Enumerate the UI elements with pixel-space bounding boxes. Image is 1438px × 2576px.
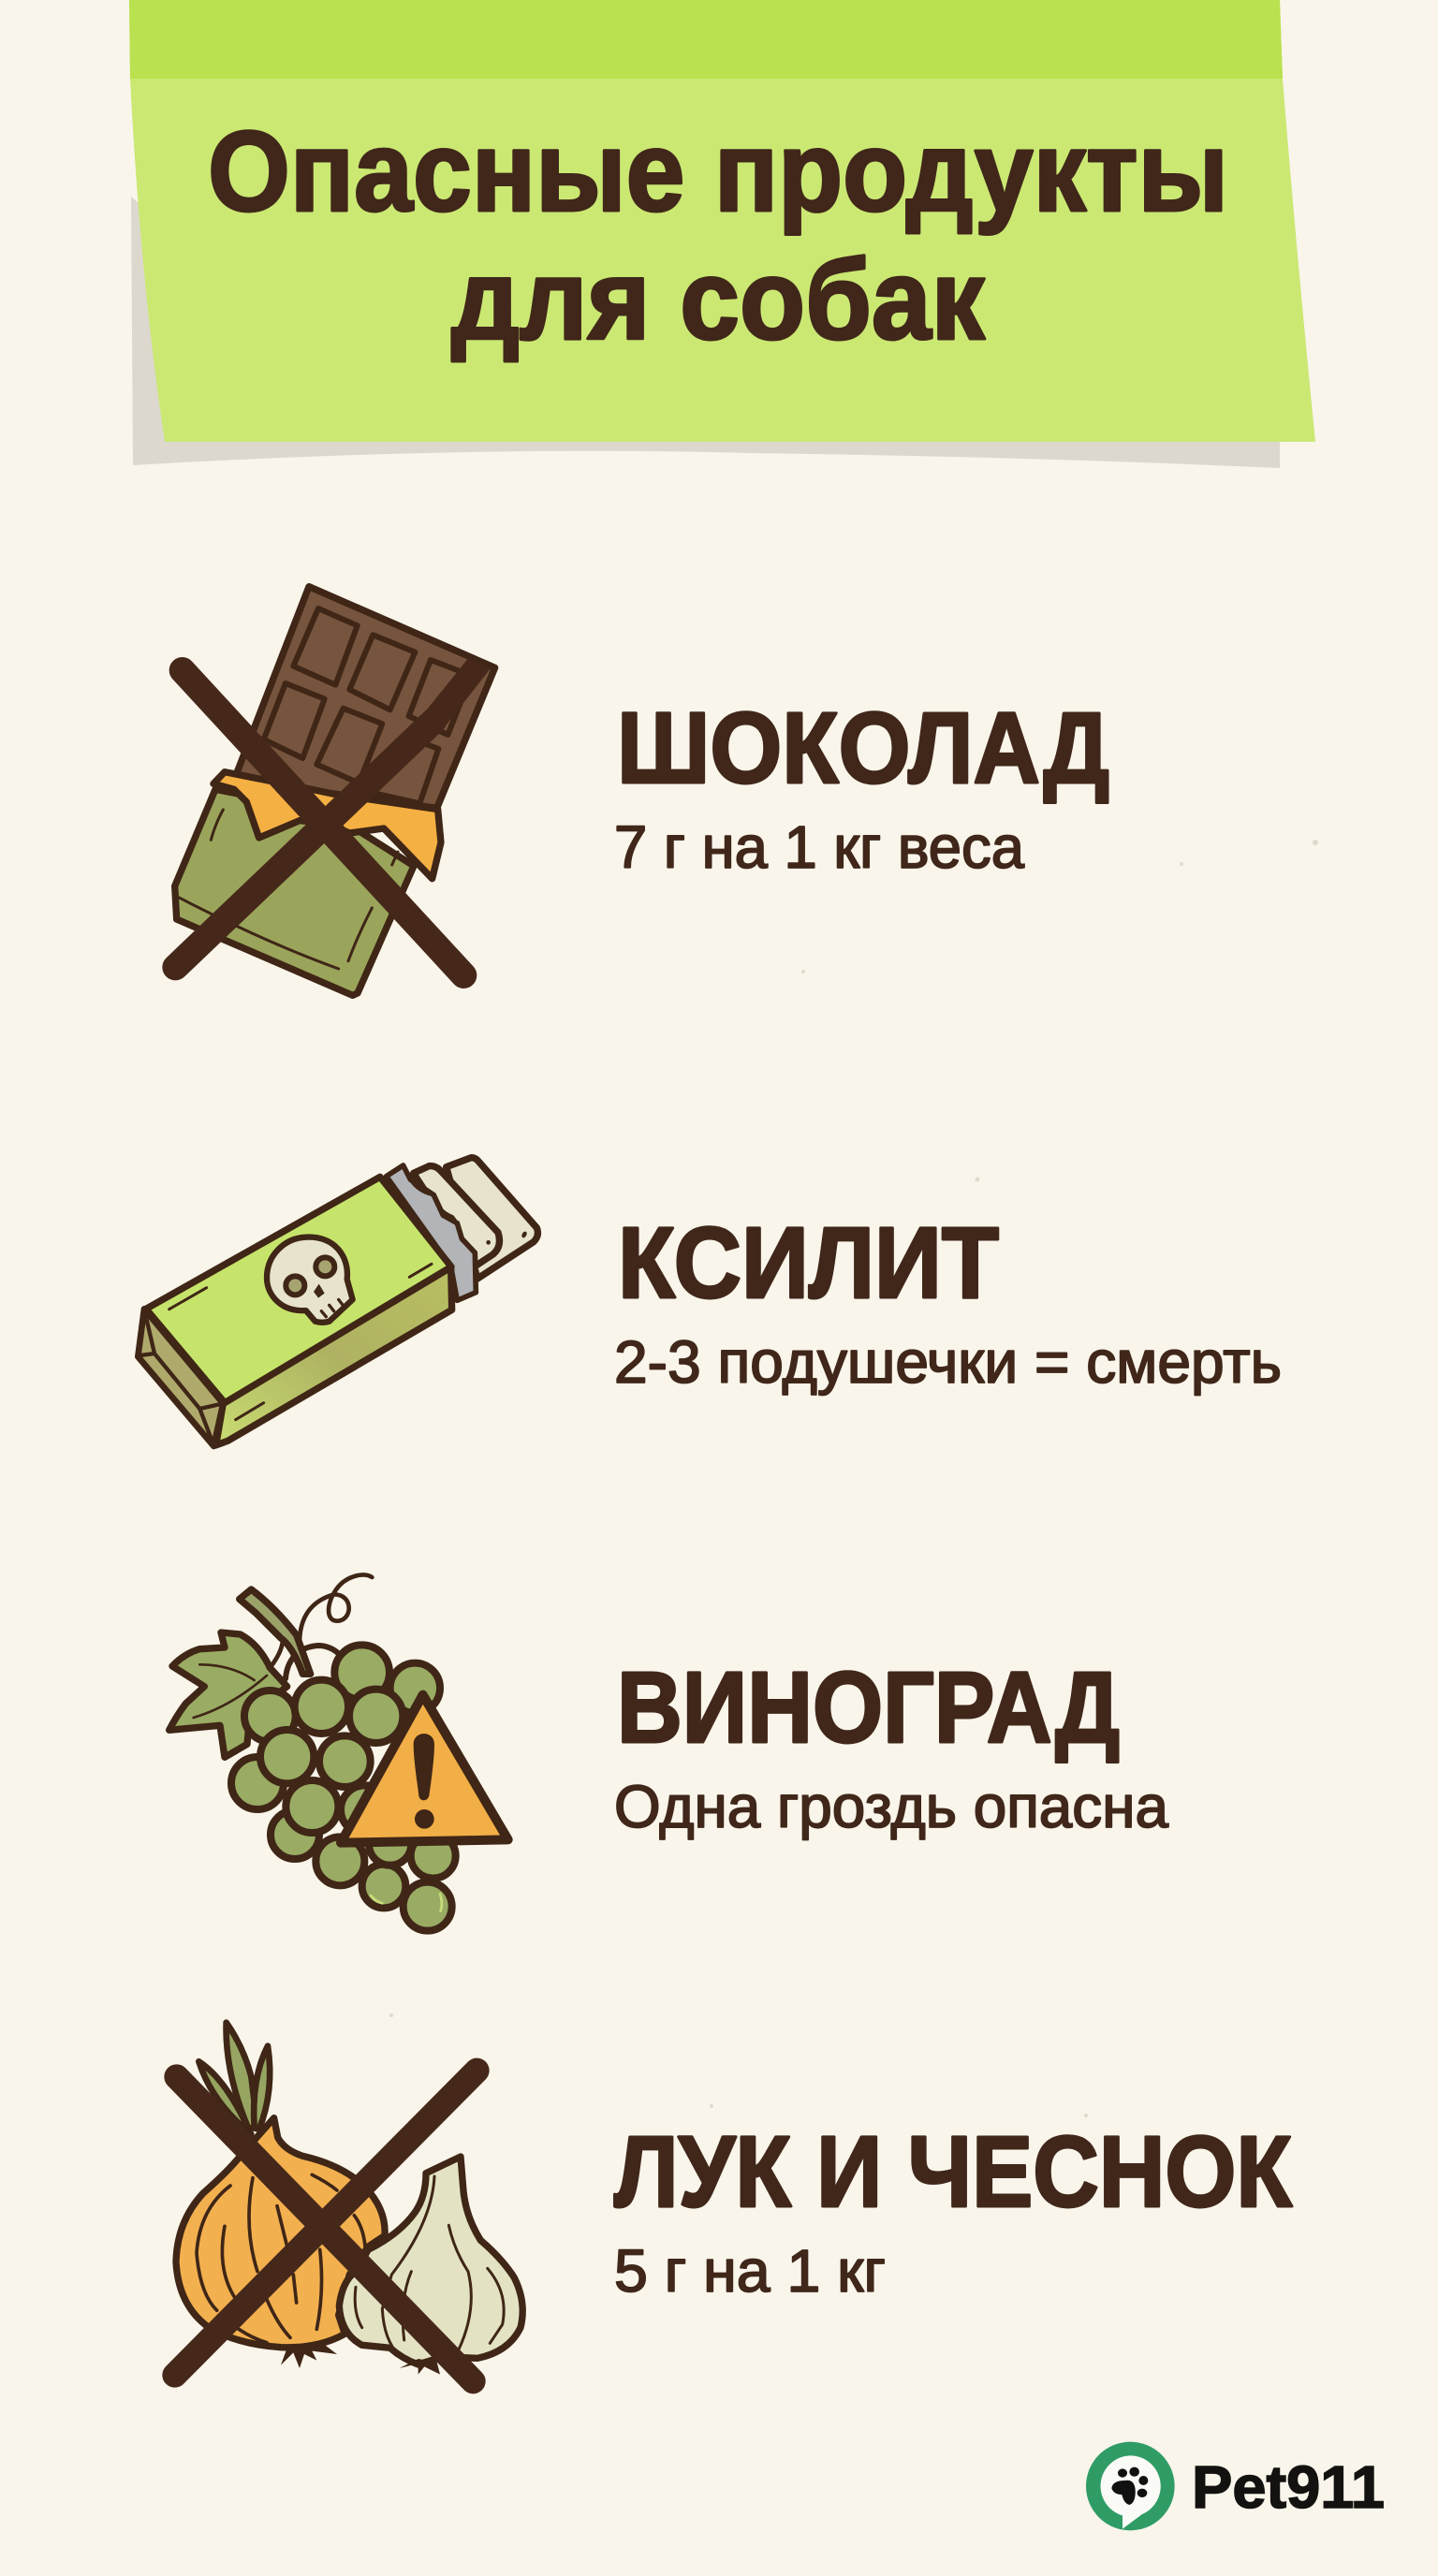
- icon: crossed onion and garlic: [175, 2023, 522, 2381]
- wordmark: Pet911: [1192, 2453, 1385, 2521]
- icon: gum pack with skull: [138, 1158, 537, 1446]
- warning triangle: [341, 1695, 508, 1843]
- skull: [267, 1237, 353, 1323]
- dose: chocolate: 7 г на 1 кг веса: [614, 813, 1024, 881]
- item: xylitol gum: [138, 1158, 1282, 1446]
- banner top strip: [129, 0, 1283, 79]
- dose: onion and garlic: 5 г на 1 кг: [614, 2237, 886, 2305]
- banner note: [129, 0, 1315, 442]
- icon: green speech-bubble paw: [1086, 2442, 1175, 2530]
- heading: chocolate: ШОКОЛАД: [617, 691, 1109, 804]
- dose: grapes: Одна гроздь опасна: [614, 1773, 1168, 1840]
- icon: crossed chocolate bar: [175, 587, 495, 995]
- title: для собак: [451, 236, 986, 363]
- heading: onion and garlic: ЛУК И ЧЕСНОК: [614, 2115, 1293, 2228]
- title: [208, 108, 1228, 363]
- banner shadow: [131, 197, 1280, 468]
- item: chocolate: [175, 587, 1109, 995]
- item: grapes: [169, 1574, 1168, 1931]
- heading: grapes: ВИНОГРАД: [617, 1650, 1120, 1764]
- logo: Pet911: [1086, 2442, 1385, 2530]
- item: onion and garlic: [175, 2023, 1293, 2381]
- dose: xylitol: 2-3 подушечки = смерть: [614, 1328, 1282, 1396]
- heading: xylitol: КСИЛИТ: [618, 1206, 999, 1319]
- title: Опасные продукты: [208, 108, 1228, 235]
- header banner: [129, 0, 1315, 468]
- icon: grapes with warning triangle: [169, 1574, 508, 1931]
